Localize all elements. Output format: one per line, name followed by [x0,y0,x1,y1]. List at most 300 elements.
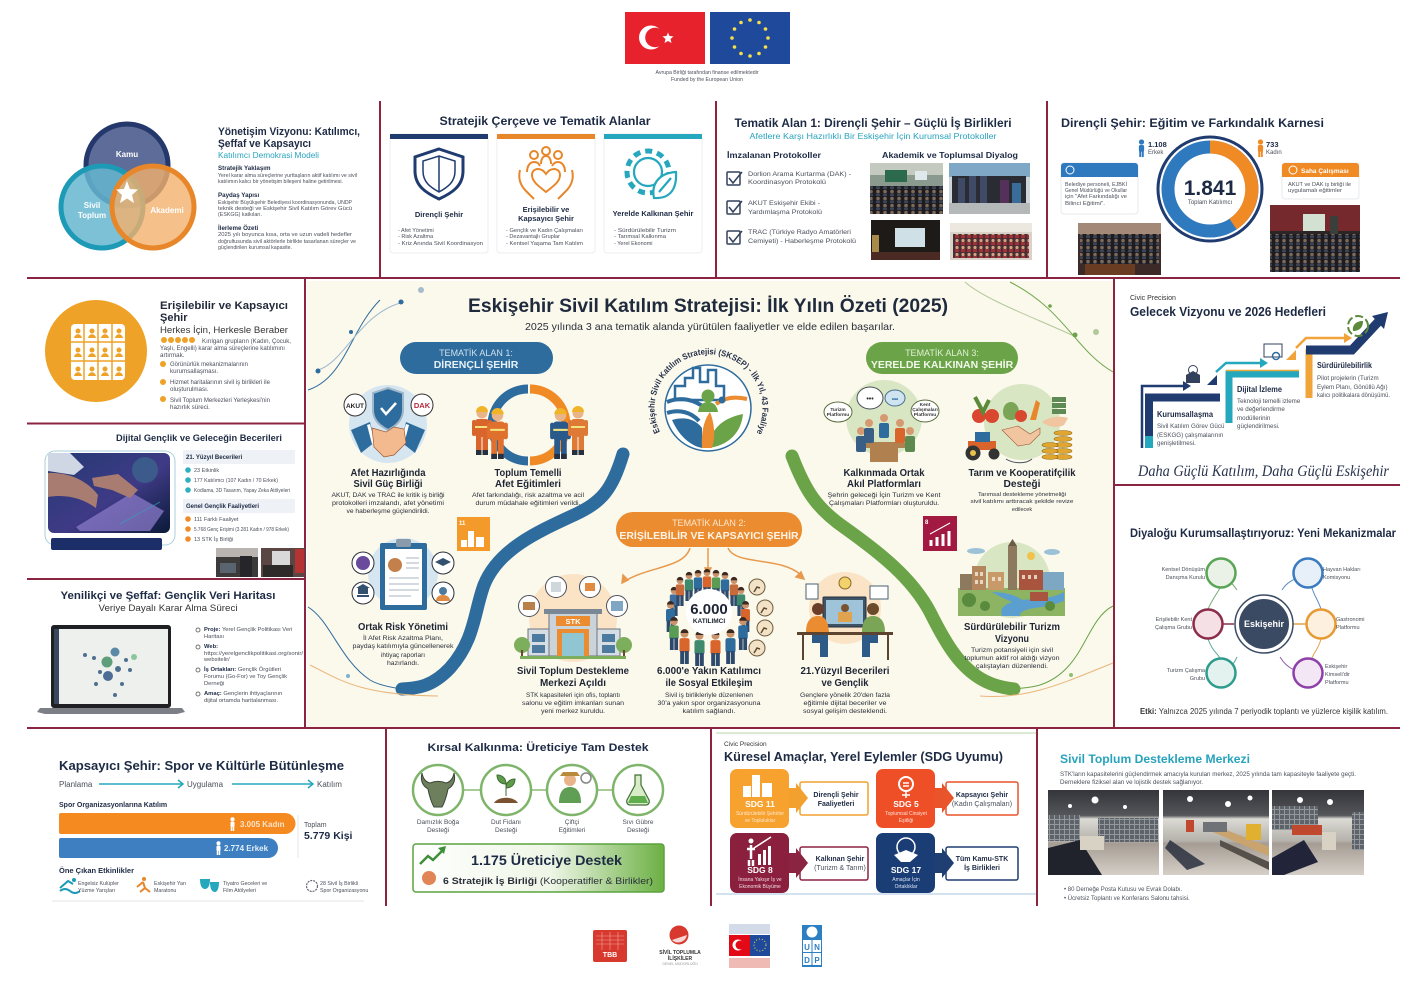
item: common mind platforms: Kalkınmada Ortak [844,468,925,479]
card: resilient city: - Afet Yönetimi [398,228,434,234]
item: community training: Toplum Temelli [494,468,562,479]
SDG heading [724,741,1003,764]
footer partner logos [593,924,822,968]
item: shared risk management: hazırlandı. [387,660,419,667]
featured events [52,866,368,901]
featured events: Maratonu [154,888,176,894]
signed protocols list [727,151,856,245]
icon: Turkish flag [625,12,705,64]
item: disaster preparedness partnership [332,385,444,515]
logo: civil society relations: GENEL MÜDÜRLÜĞÜ [662,961,698,966]
icon: SDG 11 [457,517,490,551]
accessible city bullets: kurumsallaşması. [170,368,218,375]
pill: thematic area 3: YERELDE KALKINAN ŞEHİR [871,358,1014,371]
skills lists: 13 STK İş Birliği [194,536,233,543]
future vision heading: Gelecek Vizyonu ve 2026 Hedefleri [1130,304,1326,319]
pill: thematic area 3: TEMATİK ALAN 3: [905,348,979,358]
callout: producer support: 1.175 Üreticiye Destek [471,852,622,868]
center title: Eskişehir Sivil Katılım Stratejisi: İlk Yılın Özeti (2025) [468,296,948,317]
item: disaster preparedness partnership: ve haberleşme güçlendirildi. [346,508,430,515]
SDG 11 mapping: Dirençli Şehir [813,792,859,799]
hub and spoke diagram: Gastronomi [1336,617,1364,623]
step text: digital monitoring [1237,384,1301,430]
blue ribbon [402,454,623,689]
SDG 5 mapping: Eşitliği [899,818,913,824]
accessible city bullets: oluşturulması. [170,386,209,393]
governance body text: Eskişehir Büyükşehir Belediyesi koordinasyonunda, UNDP [218,200,352,206]
governance body text: Paydaş Yapısı [218,192,259,199]
card: awareness training: Bilinci Eğitimi". [1065,201,1106,207]
skills lists [183,450,295,543]
item: agriculture and cooperatives: Tarımsal destekleme yönetmeliği [978,492,1066,498]
logo: UNDP [802,925,822,967]
support centre description [1060,772,1356,786]
dialogue photo grid: Akademik ve Toplumsal Diyalog [882,151,1018,160]
donut chart: 1.841 participants: 1.841 [1184,177,1237,200]
process flow [59,780,342,789]
item: 21st century skills and youth [797,572,893,715]
featured events: Tiyatro Geceleri ve [223,881,267,887]
governance body text: 2025 yılı boyunca kısa, orta ve uzun vadeli hedefler [218,232,352,238]
process flow: Uygulama [187,780,224,789]
skills lists: Genel Gençlik Faaliyetleri [186,504,259,510]
card: accessible city: - Gençlik ve Kadın Çalışmaları [506,228,583,234]
card: accessible city: - Kentsel Yaşama Tam Katılım [506,241,583,247]
card: accessible city: Kapsayıcı Şehir [518,214,574,223]
logo: UNDP: U [804,943,810,952]
panel: civil society support centre [1048,754,1364,902]
SDG heading: Küresel Amaçlar, Yerel Eylemler (SDG Uyumu) [724,749,1003,764]
item: common mind platforms: Kent [920,402,931,408]
digital youth heading: Dijital Gençlik ve Geleceğin Becerileri [116,433,282,444]
centre bullets [1064,887,1190,902]
card: resilient city: Dirençli Şehir [415,210,463,219]
governance body text: Stratejik Yaklaşım [218,165,271,172]
card: resilient city: - Risk Azaltma [398,234,434,240]
item: common mind platforms: Akıl Platformları [847,479,921,490]
item: disaster preparedness partnership: DAK [414,401,431,410]
logo: civil society relations: SİVİL TOPLUMLA [659,949,701,956]
logo: UNDP: P [814,956,820,965]
map project details [196,627,303,704]
SDG 8 mapping: Ekonomik Büyüme [739,884,781,890]
item: 21st century skills and youth: eğitimle dijital beceriler ve [804,700,887,707]
accessible city bullets: Görünürlük mekanizmalarının [170,361,249,368]
featured events: Yüzme Yarışları [78,888,115,894]
skills lists: Kodlama, 3D Tasarım, Yapay Zeka Atölyeleri [194,488,290,494]
step text: institutionalisation [1157,409,1225,447]
accessible city heading: Erişilebilir ve Kapsayıcı [160,300,288,312]
bar chart: sports participation: 2.774 Erkek [224,844,269,853]
panel: central strategy summary [307,281,1114,727]
card: awareness training [1061,163,1138,214]
accessible city bullets [160,337,291,411]
panel: governance vision [61,124,360,251]
item: common mind platforms: ••• [892,397,898,403]
map project details: Haritası [204,634,224,640]
hub and spoke diagram: Erişilebilir Kent [1156,617,1192,623]
item: common mind platforms: Platformu [914,412,936,418]
item: disaster preparedness partnership: protokolleri imzalandı, afet yönetimi [332,500,444,507]
hub and spoke diagram: Turizm Çalışma [1167,668,1206,674]
skills lists: 21. Yüzyıl Becerileri [186,455,243,461]
youth data map heading [60,590,276,614]
item: sustainable tourism vision: Turizm potansiyeli için sivil [971,647,1054,654]
step text: institutionalisation: Kurumsallaşma [1157,409,1213,419]
step text: digital monitoring: güçlendirilmesi. [1237,423,1280,430]
SDG 5 mapping: Toplumsal Cinsiyet [885,811,927,817]
accessible city heading [160,300,288,336]
funding caption: Avrupa Birliği tarafından finanse edilmektedir [656,70,759,76]
item: civil society support centre: STK kapasiteleri için ofis, toplantı [526,692,620,699]
support icons row: Desteği [427,827,449,834]
step text: institutionalisation: genişletilmesi. [1157,440,1196,447]
SDG 11 mapping: ve Topluluklar [745,818,776,824]
step text: digital monitoring: Teknoloji temelli izleme [1237,398,1301,405]
centre bullets: • Ücretsiz Toplantı ve Konferans Salonu tahsisi. [1064,895,1190,902]
training photos [1078,205,1360,275]
hub and spoke diagram: Çalışma Grubu [1155,625,1192,631]
scorecard heading: Dirençli Şehir: Eğitim ve Farkındalık Karnesi [1061,118,1324,130]
youth data map heading: Veriye Dayalı Karar Alma Süreci [98,603,238,614]
women count [1258,139,1282,157]
signed protocols list: İmzalanan Protokoller [727,151,821,160]
SDG 8 mapping: SDG 8 [747,865,773,875]
SDG 17 mapping: İş Birlikleri [964,864,1000,872]
accessible city bullets: Sivil Toplum Merkezleri Yerleşkesi'nin [170,397,271,404]
step text: institutionalisation: (ESKGG) çalışmalarının [1157,432,1224,439]
item: 21st century skills and youth: sosyal gelişim desteklendi. [803,708,887,715]
logo: TBB: TBB [603,952,617,959]
venn diagram: Toplum [78,211,106,220]
men count: 1.108 [1148,140,1167,149]
panel: resilient city training scorecard [1061,118,1360,275]
item: common mind platforms: Çalışmaları [912,407,938,413]
mechanisms heading: Diyaloğu Kurumsallaştırıyoruz: Yeni Mekanizmalar [1130,528,1396,540]
featured events: Eskişehir Yarı [154,881,186,887]
featured events: Spor Organizasyonu [320,888,368,894]
panel: SDG alignment [716,733,1036,894]
thematic area 1 heading: Tematik Alan 1: Dirençli Şehir – Güçlü İş Birlikleri [734,117,1012,130]
hub and spoke diagram: Komisyonu [1323,575,1350,581]
thematic area 1 heading [734,117,1012,141]
step text: sustainability: Sürdürülebilirlik [1317,360,1372,370]
bar chart: sports participation: 3.005 Kadın [240,820,285,829]
map project details: websitelir/ [203,657,230,663]
item: common mind platforms: Çalışmaları Platformları oluşturuldu. [829,500,939,507]
support icons row [413,765,663,834]
card: locally developing city: - Yerel Ekonomi [614,241,653,247]
item: 21st century skills and youth: 21.Yüzyıl Becerileri [800,666,890,677]
signed protocols list: Cemiyeti) - Haberleşme Protokolü [748,238,856,245]
governance body text: İlerleme Özeti [218,225,259,232]
donut chart: 1.841 participants: Toplam Katılımcı [1188,200,1232,206]
skills lists: 23 Etkinlik [194,468,219,474]
women count: 733 [1266,140,1279,149]
hub and spoke diagram: Eskişehir [1325,664,1347,670]
support icons row: Eğitimleri [559,827,585,834]
future vision heading [1130,295,1326,319]
pill: thematic area 2: TEMATİK ALAN 2: [672,518,746,528]
item: civil society support centre: Sivil Toplum Destekleme [517,666,629,677]
icon: EU flag [710,12,790,64]
men count [1139,139,1167,157]
pill: thematic area 3 [866,342,1018,374]
hub and spoke diagram: Eskişehir [1244,619,1285,629]
venn diagram [61,124,194,248]
callout: producer support [413,844,664,892]
governance body text: teknik desteği ve Eskişehir Sivil Katılım Görev Gücü [218,206,352,212]
card: awareness training: için "Afet Farkındalığı ve [1065,194,1127,200]
impact note: Etki: Yalnızca 2025 yılında 7 periyodik toplantı ve yüzlerce kişilik katılım. [1140,707,1388,716]
pill: thematic area 1: DİRENÇLİ ŞEHİR [434,358,519,371]
card: resilient city: - Kriz Anında Sivil Koordinasyon [398,241,483,247]
card: accessible city: - Dezavantajlı Gruplar [506,234,560,240]
pill: thematic area 2 [616,512,802,547]
panel: strategic framework [390,116,702,253]
item: common mind platforms: Şehrin geleceği İçin Turizm ve Kent [828,490,941,499]
icon: diverse faces badge [45,300,147,402]
card: resilient city [390,134,488,253]
SDG 17 mapping: Amaçlar İçin [892,876,920,883]
skills lists: 5.768 Genç Erişimi (3.281 Kadın / 978 Erkek) [194,527,289,533]
support icons row: Dut Fidanı [491,819,521,826]
governance heading: Yönetişim Vizyonu: Katılımcı, [218,126,360,138]
SDG 5 mapping: SDG 5 [893,799,919,809]
card: locally developing city: - Sürdürülebilir Turizm [614,228,676,234]
item: civil society support centre: yeni merkez kuruldu. [541,708,605,715]
SDG 11 mapping [730,769,868,828]
hub and spoke diagram: Danışma Kurulu [1166,575,1205,581]
card: awareness training: Genel Müdürlüğü ve Okullar [1065,188,1127,194]
SDG 5 mapping: (Kadın Çalışmaları) [952,801,1012,808]
workshop photos [216,548,305,577]
governance body text: katılımın kalıcı bir yönetişim bileşeni haline getirilmesi. [218,179,343,185]
featured events: Engelsiz Kulüpler [78,881,119,887]
venn diagram: Akademi [150,206,184,215]
support icons row: Çiftçi [565,819,579,826]
logo: TBB [593,930,627,962]
step text: institutionalisation: Sivil Katılım Görev Gücü [1157,423,1225,430]
map project details: Amaç: Gençlerin ihtiyaçlarının [204,691,282,697]
signed protocols list: Yardımlaşma Protokolü [748,209,822,216]
item: common mind platforms: Platformu [827,412,849,418]
SDG 8 mapping: Kalkınan Şehir [816,856,865,863]
bar chart: sports participation: Toplam [304,822,327,829]
governance body text: Yerel karar alma süreçlerine yurttaşların aktif katılımı ve sivil [218,173,357,179]
featured events: Film Atölyeleri [223,888,256,894]
item: civil society support centre: Merkezi Açıldı [540,678,606,689]
funding caption: Funded by the European Union [671,77,743,83]
item: agriculture and cooperatives [966,384,1076,513]
SDG 8 mapping [730,833,868,893]
icon: SDG 8: 8 [925,520,929,526]
panel: thematic area 1 protocols [727,117,1032,260]
accessible city bullets: Hizmet haritalarının sivil iş birlikleri ile [170,379,271,386]
icon: SDG 11: 11 [459,521,466,527]
signed protocols list: Dorlion Arama Kurtarma (DAK) - [748,171,851,178]
hub and spoke diagram: Hayvan Hakları [1323,567,1361,573]
SDG 17 mapping [876,833,1018,893]
item: community training [472,389,588,507]
step text: sustainability: Eylem Planı, Gönüllü Ağı) [1317,384,1388,391]
signed protocols list: Koordinasyon Protokolü [748,179,826,186]
hub and spoke diagram: Platformu [1325,680,1349,686]
step text: sustainability: Pilot projelerin (Turizm [1317,375,1379,382]
featured events: Öne Çıkan Etkinlikler [59,866,134,875]
accessible city heading: Şehir [160,312,188,324]
governance body text: (ESKGG) katkıları. [218,212,262,218]
governance body text [218,165,357,251]
SDG 17 mapping: Ortaklıklar [895,884,918,890]
laptop with map [37,625,185,714]
bar chart: sports participation: Spor Organizasyonlarına Katılım [59,802,167,809]
panel: digital youth skills [45,433,305,577]
item: 21st century skills and youth: Gençlere yönelik 20'den fazla [800,692,890,699]
item: shared risk management: İl Afet Risk Azaltma Planı, [363,633,443,642]
dialogue photo grid [870,151,1032,260]
item: shared risk management: ihtiyaç raporları [381,652,425,659]
item: common mind platforms: ••• [866,396,874,403]
card: locally developing city: Yerelde Kalkınan Şehir [613,209,694,218]
men count: Erkek [1148,150,1164,156]
item: shared risk management: paydaş katılımıyla güncellenerek [352,643,454,650]
item: disaster preparedness partnership: AKUT, DAK ve TRAC ile kritik iş birliği [332,492,444,499]
SDG 11 mapping: Sürdürülebilir Şehirler [736,811,784,817]
item: agriculture and cooperatives: sivil katılımı arttıracak şekilde revize [970,499,1074,505]
panel: inclusive city sports and culture [52,759,368,901]
slogan: Daha Güçlü Katılım, Daha Güçlü Eskişehir [1137,463,1390,480]
card: accessible city [497,134,595,253]
emblem: SKSEP [648,348,768,452]
venn diagram: Sivil [84,201,100,210]
step text: sustainability [1317,360,1390,399]
map project details: Forumu (Go-For) ve Toy Gençlik [204,674,287,680]
governance heading: Katılımcı Demokrasi Modeli [218,150,319,160]
laptop typing image [45,451,175,550]
SDG 5 mapping: Kapsayıcı Şehir [956,792,1008,799]
signed protocols list: TRAC (Türkiye Radyo Amatörleri [748,229,851,236]
item: 6000 participants: 6.000 [690,601,728,618]
framework heading: Stratejik Çerçeve ve Tematik Alanlar [440,116,651,128]
support centre heading: Sivil Toplum Destekleme Merkezi [1060,754,1250,766]
signed protocols list: AKUT Eskişehir Ekibi - [748,200,820,207]
card: awareness training: Belediye personeli, EJBKİ [1065,181,1127,188]
item: common mind platforms: Turizm [830,407,846,413]
step text: digital monitoring: ve değerlendirme [1237,406,1285,413]
women count: Kadın [1266,150,1282,156]
accessible city bullets: Yaşlı, Engelli) karar alma süreçlerine katılımını [160,345,285,352]
SDG 8 mapping: İnsana Yakışır İş ve [738,876,782,883]
hub and spoke diagram: Platformu [1336,625,1360,631]
maroon grid dividers [27,101,1400,906]
item: sustainable tourism vision: Vizyonu [995,634,1029,645]
hub and spoke diagram: Kimseli'dir [1325,672,1350,678]
hub and spoke diagram: Kentsel Dönüşüm [1162,567,1205,573]
logo: Turkey EU joint [729,924,770,968]
hub and spoke diagram [1155,558,1364,688]
item: common mind platforms [824,380,941,507]
youth data map heading: Yenilikçi ve Şeffaf: Gençlik Veri Haritası [60,590,276,602]
decorative flourishes [308,282,1113,697]
support icons row: Sıvı Gübre [622,819,654,826]
bar chart: sports participation [59,802,353,858]
callout: producer support: 6 Stratejik İş Birliği (Kooperatifler & Birlikler) [443,876,653,887]
panel: future vision and 2026 targets [1130,295,1390,480]
card: accessible city: Erişilebilir ve [523,205,569,214]
staircase arrows [1142,312,1388,448]
item: civil society support centre: salonu ve eğitim imkanları sunan [522,700,624,707]
map project details: dijital ortamda haritalanması. [204,698,278,704]
accessible city heading: Herkes İçin, Herkesle Beraber [160,325,288,336]
panel: youth data map [37,590,303,714]
pill: thematic area 2: ERİŞİLEBİLİR VE KAPSAYICI ŞEHİR [619,529,799,542]
logo: UNDP: D [804,956,810,965]
skills lists: 111 Farklı Faaliyet [194,517,239,523]
governance heading [218,126,360,160]
SDG 17 mapping: Tüm Kamu-STK [956,856,1008,863]
step text: digital monitoring: Dijital İzleme [1237,384,1282,394]
pill: thematic area 1 [400,342,553,374]
map project details: Derneği [204,681,224,687]
green ribbon [792,456,1014,689]
item: civil society support centre [514,574,632,715]
item: 21st century skills and youth: ve Gençlik [822,678,869,689]
support icons row: Desteği [627,827,649,834]
logo: civil society relations: İLİŞKİLER [668,955,692,962]
card: locally developing city [604,134,702,253]
item: 6000 participants: Sivil iş birlikleriyle düzenlenen [665,692,753,699]
panel: new dialogue mechanisms [1130,528,1396,716]
governance body text: doğrultusunda sivil aktörlerle birlikte tasarlanan süreçler ve [218,239,356,245]
pill: thematic area 1: TEMATİK ALAN 1: [439,348,513,358]
step text: sustainability: kalıcı politikalara dönüşümü. [1317,392,1390,399]
item: community training: Afet Eğitimleri [495,479,561,490]
accessible city bullets: artırmak. [160,352,185,359]
support centre description: STK'ların kapasitelerini güçlendirmek amacıyla kurulan merkez, 2025 yılında tam kapasiteyle faaliyete geçti. [1060,772,1356,778]
funding caption [656,70,759,83]
future vision heading: Civic Precision [1130,295,1176,302]
map project details: https://yerelgenclikpolitikasi.org/sonir/ [204,651,303,657]
rural development heading: Kırsal Kalkınma: Üreticiye Tam Destek [428,741,649,754]
item: 6000 participants: KATILIMCI [693,618,725,625]
SDG heading: Civic Precision [724,741,767,748]
item: 6000 participants: ile Sosyal Etkileşim [666,678,753,689]
item: agriculture and cooperatives: edilecek [1012,507,1032,513]
item: sustainable tourism vision: çalıştayları düzenlendi. [976,663,1048,670]
accessible city bullets: Kırılgan grupların (Kadın, Çocuk, [202,338,291,345]
item: 6000 participants [657,569,773,715]
item: sustainable tourism vision [958,539,1065,670]
item: 6000 participants: 6.000'e Yakın Katılımcı [657,666,761,677]
item: disaster preparedness partnership: Afet Hazırlığında [350,468,426,479]
SDG 5 mapping [876,769,1018,828]
process flow: Katılım [317,780,342,789]
item: 6000 participants: katılım sağlandı. [682,708,736,715]
item: disaster preparedness partnership: Sivil Güç Birliği [354,479,423,490]
icons on stairs [1186,316,1368,383]
centre photos [1048,790,1364,875]
item: sustainable tourism vision: toplumun aktif rol aldığı vizyon [964,655,1060,662]
venn diagram: Kamu [116,150,138,159]
item: shared risk management [352,538,454,667]
item: sustainable tourism vision: Sürdürülebilir Turizm [964,622,1060,633]
center background [307,281,1113,727]
donut chart: 1.841 participants [1158,137,1262,241]
arrows from thematic area 2 [622,548,804,583]
process flow: Planlama [59,780,93,789]
card: locally developing city: - Tarımsal Kalkınma [614,234,667,240]
